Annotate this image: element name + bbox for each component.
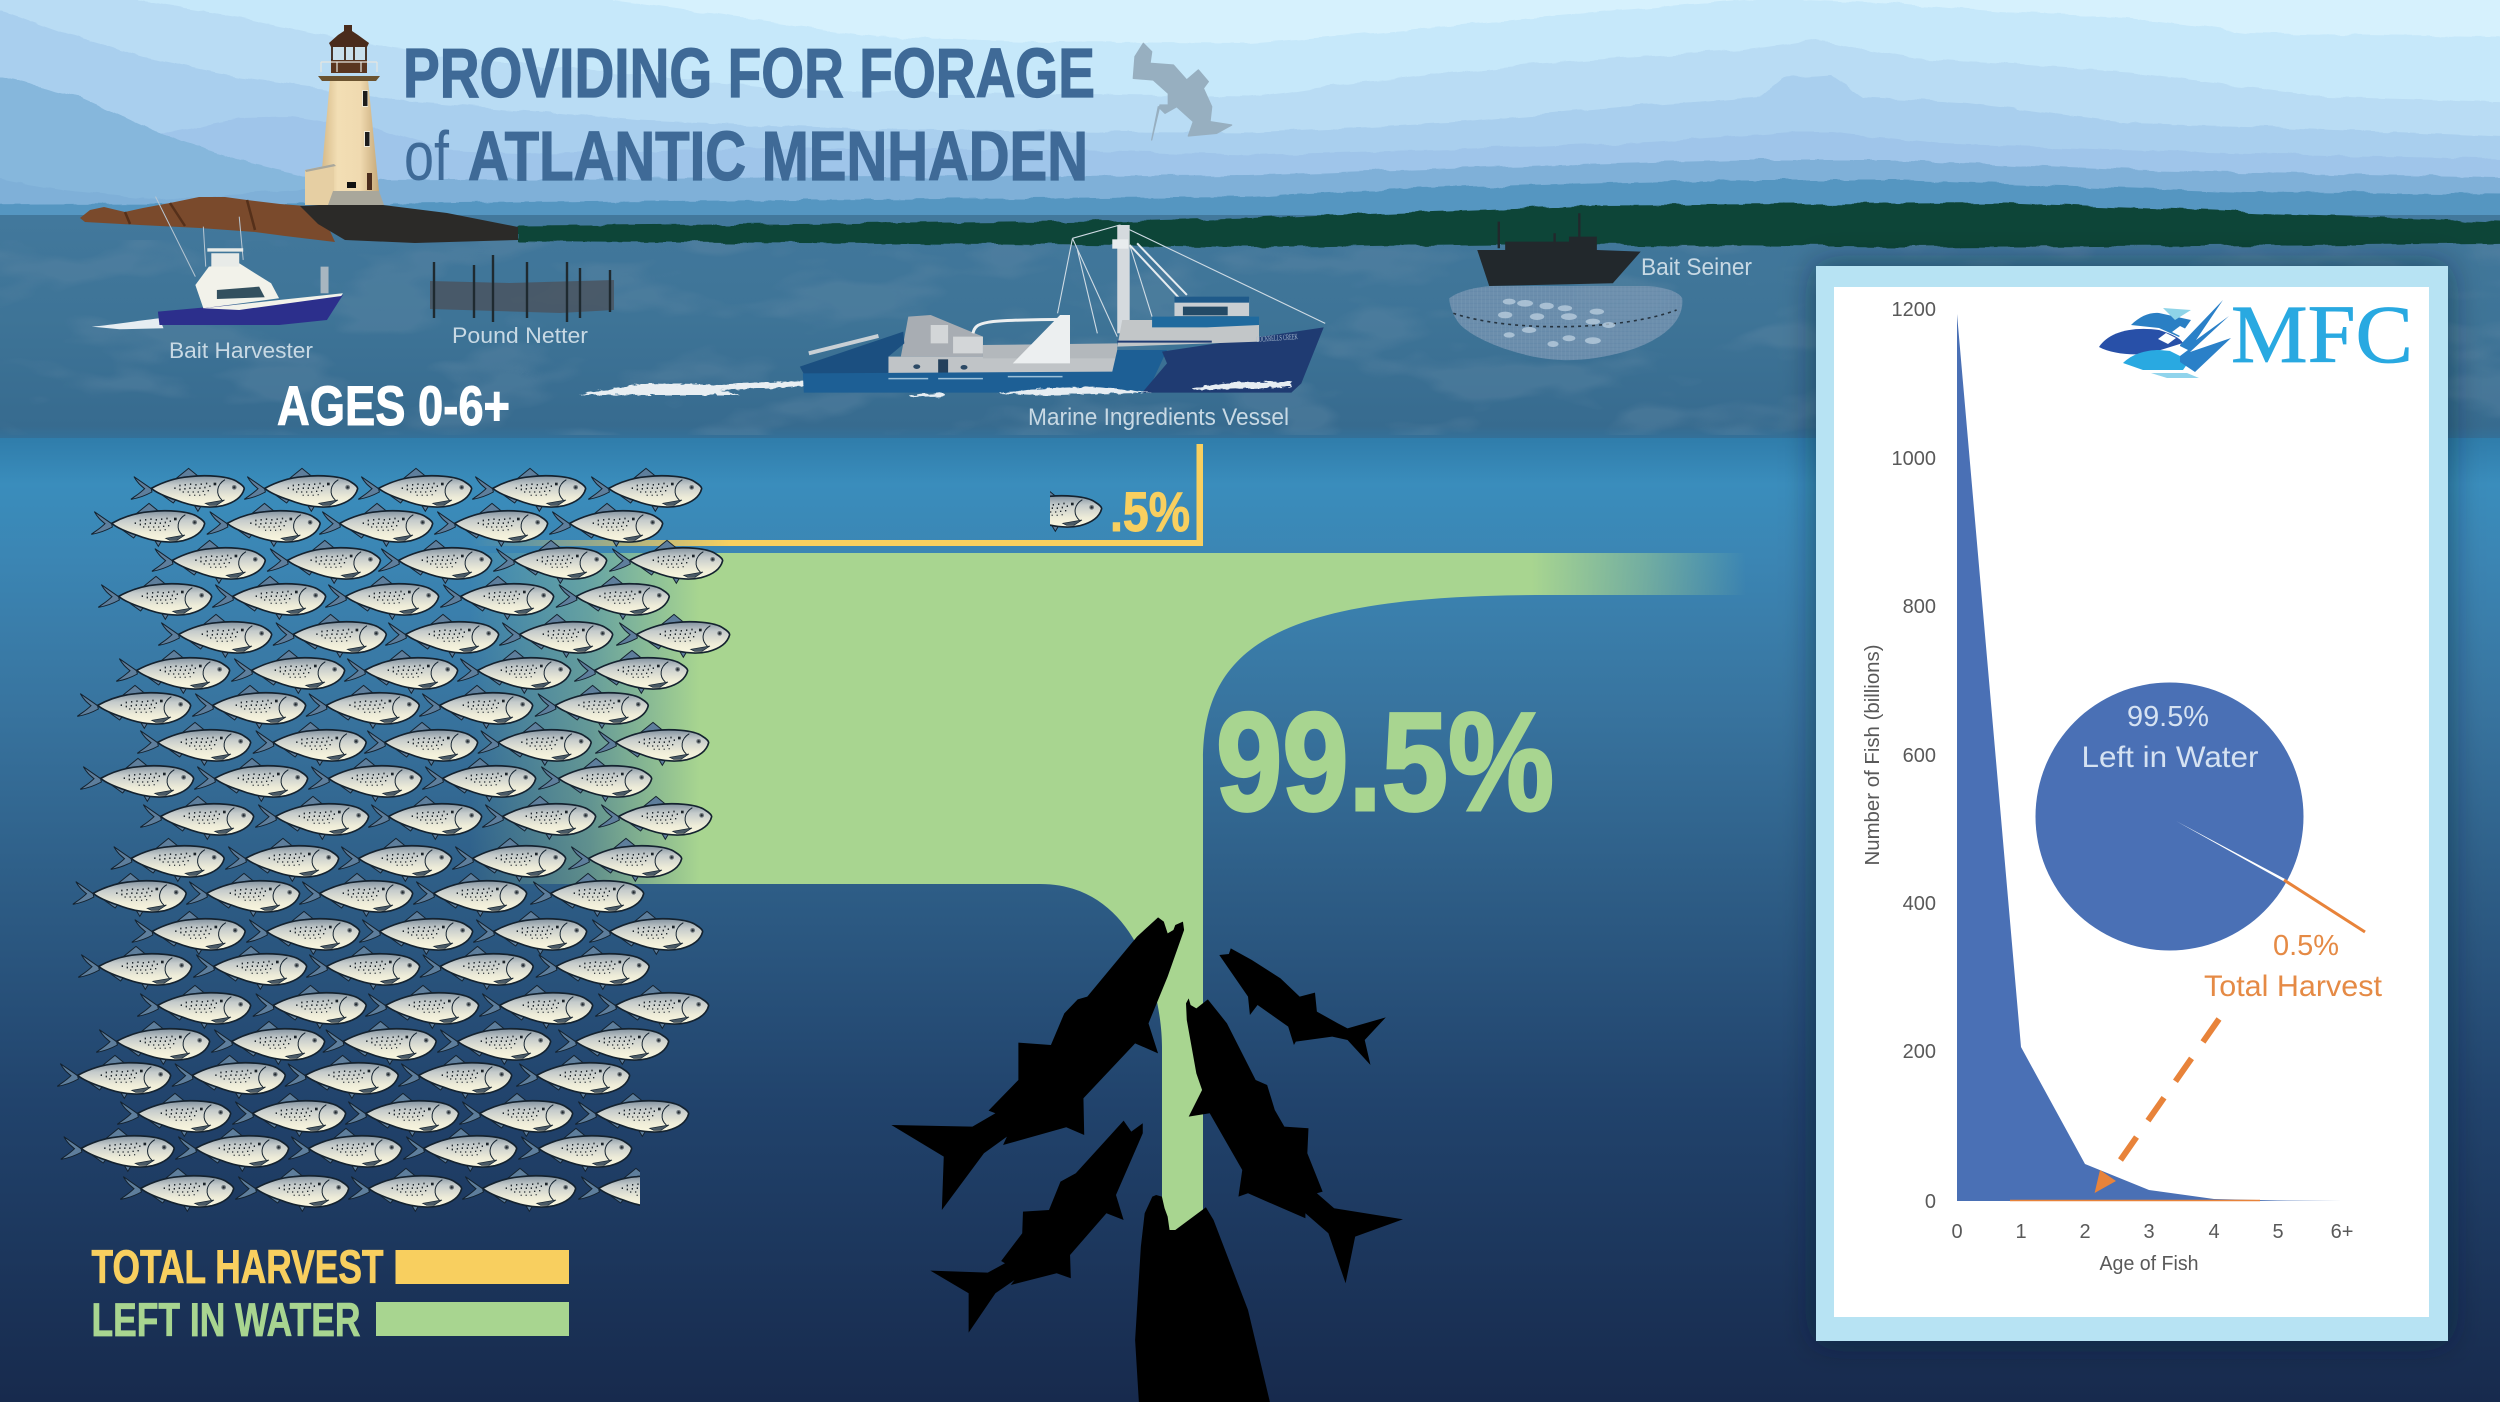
x axis labels: 0 [1951,1221,1963,1243]
y axis labels: 1000 [1892,448,1936,470]
label: marine ingredients vessel: Marine Ingredients Vessel [1028,404,1289,431]
arrow: dashed pointer to harvest [2095,1019,2219,1193]
label: bait harvester: Bait Harvester [169,338,313,363]
x axis title: Age of Fish [2100,1253,2198,1275]
y axis title: Number of Fish (billions) [1862,644,1884,866]
logo: MFC [2099,288,2413,382]
stat: .5% harvested: .5% [1110,480,1190,543]
y axis labels: 800 [1903,596,1936,618]
left-in-water flow band [470,553,1746,1240]
callout: total harvest share [2204,930,2383,1003]
title: of [404,117,449,195]
y axis labels: 1200 [1892,299,1936,321]
y axis labels: 400 [1903,893,1936,915]
distant tree line [518,203,2500,247]
x axis labels: 2 [2079,1221,2091,1243]
x axis labels: 6+ [2331,1221,2353,1243]
icon: diving pelican [1133,43,1232,140]
pie chart: Left in Water [2082,741,2258,774]
underwater gradient [0,438,2500,1402]
heading: ages: AGES 0-6+ [277,374,510,437]
y axis labels: 600 [1903,745,1936,767]
pie chart: 99.5% [2127,701,2209,733]
y axis labels: 0 [1925,1191,1936,1213]
predator fish silhouettes [891,917,1403,1402]
title: ATLANTIC MENHADEN [468,117,1088,195]
callout: total harvest share: 0.5% [2273,930,2339,962]
label: bait seiner: Bait Seiner [1641,254,1752,281]
title [403,34,1095,195]
legend: left in water: LEFT IN WATER [92,1293,360,1346]
y axis labels: 200 [1903,1041,1936,1063]
x axis labels: 4 [2208,1221,2220,1243]
x axis labels: 3 [2143,1221,2155,1243]
area chart: number of fish by age [1957,314,2342,1201]
surface water band with mottled reflections [0,215,2500,442]
icon: bait harvester boat [92,197,343,329]
icon: half fish for harvest share [1050,491,1102,532]
icon: marine ingredients vessel [580,225,1325,397]
y axis labels [1892,299,1936,1213]
orange harvest baseline [2010,1200,2260,1202]
vessel name on bow: COCKRELLS CREEK [1256,332,1298,344]
pie chart [2036,682,2365,950]
x axis labels: 5 [2272,1221,2284,1243]
x axis labels: 1 [2015,1221,2027,1243]
icon: bait seiner and purse net [1449,213,1682,360]
stat: 99.5% left in water: 99.5% [1216,683,1554,840]
rocky island [80,197,518,243]
total harvest flow line [470,444,1203,546]
background: sky and mountain ridges [0,0,2500,300]
legend: total harvest: TOTAL HARVEST [92,1240,384,1293]
icon: lighthouse [305,25,384,205]
fish school [57,468,730,1211]
panel: age distribution chart [1816,266,2448,1341]
label: pound netter: Pound Netter [452,323,588,348]
icon: pound net [430,255,614,322]
logo: MFC: MFC [2231,288,2413,380]
x axis labels [1951,1221,2353,1243]
callout: total harvest share: Total Harvest [2204,970,2383,1003]
title: PROVIDING FOR FORAGE [403,34,1095,112]
